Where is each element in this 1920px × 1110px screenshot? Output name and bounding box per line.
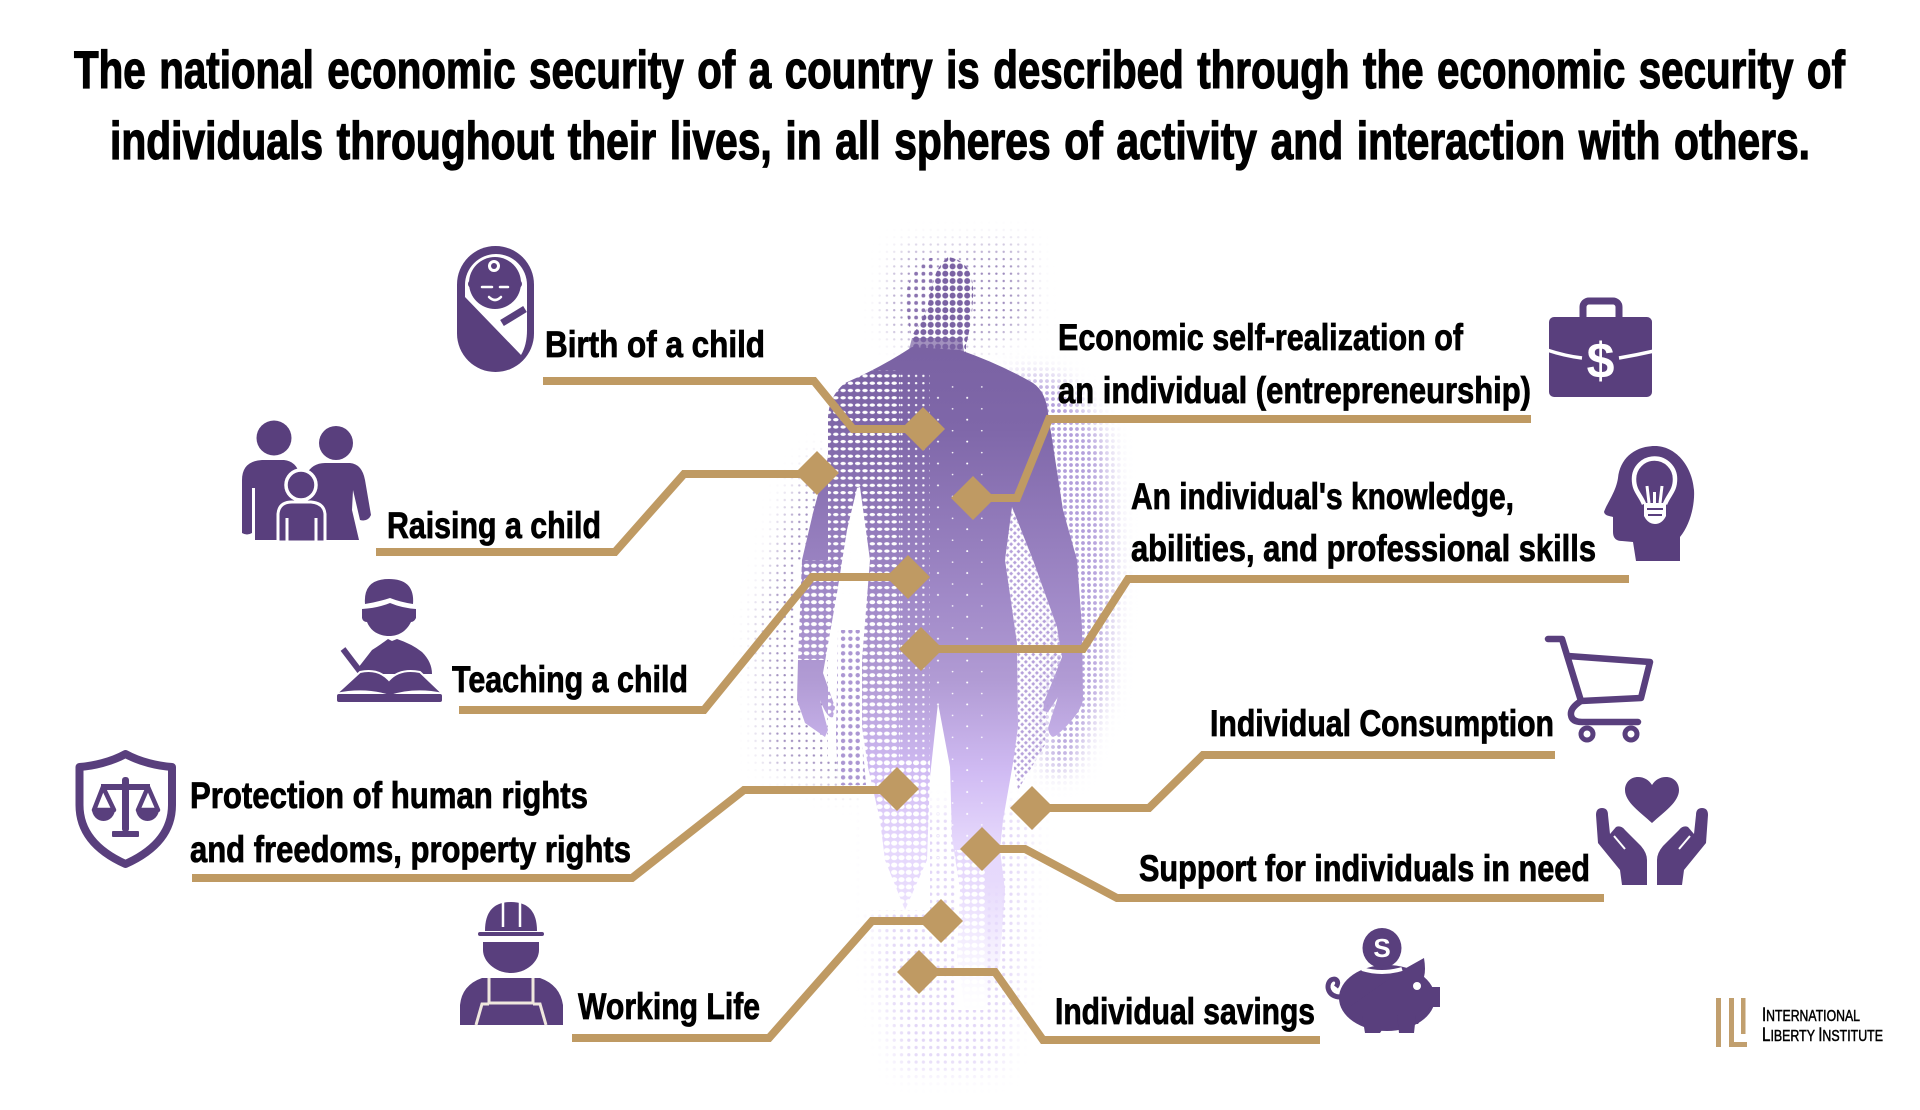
- item: economic self-realization: [951, 301, 1654, 520]
- label: [1131, 476, 1596, 569]
- label: Individual Consumption: [1210, 703, 1554, 744]
- icon: swaddled baby: [457, 246, 534, 372]
- icon: briefcase with dollar: $: [1587, 333, 1615, 389]
- logo mark: [1716, 998, 1747, 1047]
- label: Individual savings: [1055, 991, 1315, 1032]
- logo text: LIBERTY INSTITUTE: [1762, 1025, 1883, 1046]
- icon: shield with scales: [80, 754, 172, 864]
- connector with diamond: [1010, 755, 1555, 830]
- connector with diamond: [376, 451, 839, 552]
- label: and freedoms, property rights: [190, 829, 631, 870]
- icon: hands holding heart: [1596, 777, 1708, 885]
- item: birth of a child: [457, 246, 945, 451]
- logo text: [1762, 1005, 1883, 1046]
- label: an individual (entrepreneurship): [1058, 370, 1531, 411]
- item: teaching a child: [336, 555, 930, 710]
- icon: student reading: [336, 579, 443, 702]
- label: An individual's knowledge,: [1131, 476, 1514, 517]
- connector with diamond: [192, 767, 919, 878]
- icon: family: [242, 420, 371, 542]
- label: Economic self-realization of: [1058, 317, 1464, 358]
- item: individual consumption: [1010, 639, 1650, 830]
- item: individual savings: [897, 928, 1440, 1040]
- label: Teaching a child: [452, 659, 688, 700]
- label: abilities, and professional skills: [1131, 528, 1596, 569]
- item: knowledge and skills: [899, 446, 1694, 671]
- connector with diamond: [897, 950, 1320, 1040]
- left gap dots: [836, 630, 866, 785]
- item: raising a child: [242, 420, 839, 552]
- connector with diamond: [572, 899, 963, 1038]
- icon: construction worker: [460, 902, 563, 1025]
- item: working life: [460, 899, 963, 1038]
- connector with diamond: [960, 827, 1604, 898]
- icon: head with light bulb: [1604, 446, 1694, 561]
- label: Birth of a child: [545, 324, 765, 365]
- connector with diamond: [899, 579, 1629, 671]
- item: support for individuals in need: [960, 777, 1708, 898]
- label: [190, 775, 631, 870]
- title: [74, 41, 1845, 171]
- label: Support for individuals in need: [1139, 848, 1590, 889]
- connector with diamond: [951, 419, 1531, 520]
- label: Working Life: [578, 986, 760, 1027]
- white halftone holes: [795, 370, 990, 1010]
- icon: shopping cart: [1548, 639, 1650, 740]
- silhouette: [797, 347, 1083, 1010]
- connector with diamond: [459, 555, 930, 710]
- halo dots: [747, 229, 1126, 1078]
- arm gap dots: [1005, 507, 1062, 790]
- item: protection of rights: [80, 754, 919, 878]
- logo: International Liberty Institute: [1716, 998, 1883, 1047]
- logo text: INTERNATIONAL: [1762, 1005, 1860, 1026]
- icon: piggy bank with coin: S: [1373, 933, 1391, 963]
- connector with diamond: [543, 381, 945, 451]
- label: Protection of human rights: [190, 775, 588, 816]
- label: Raising a child: [387, 505, 601, 546]
- label: [1058, 317, 1531, 411]
- head dots: [905, 257, 973, 365]
- halftone human figure: [747, 229, 1126, 1078]
- icon: briefcase with dollar: [1547, 301, 1654, 397]
- icon: piggy bank with coin: [1328, 928, 1440, 1033]
